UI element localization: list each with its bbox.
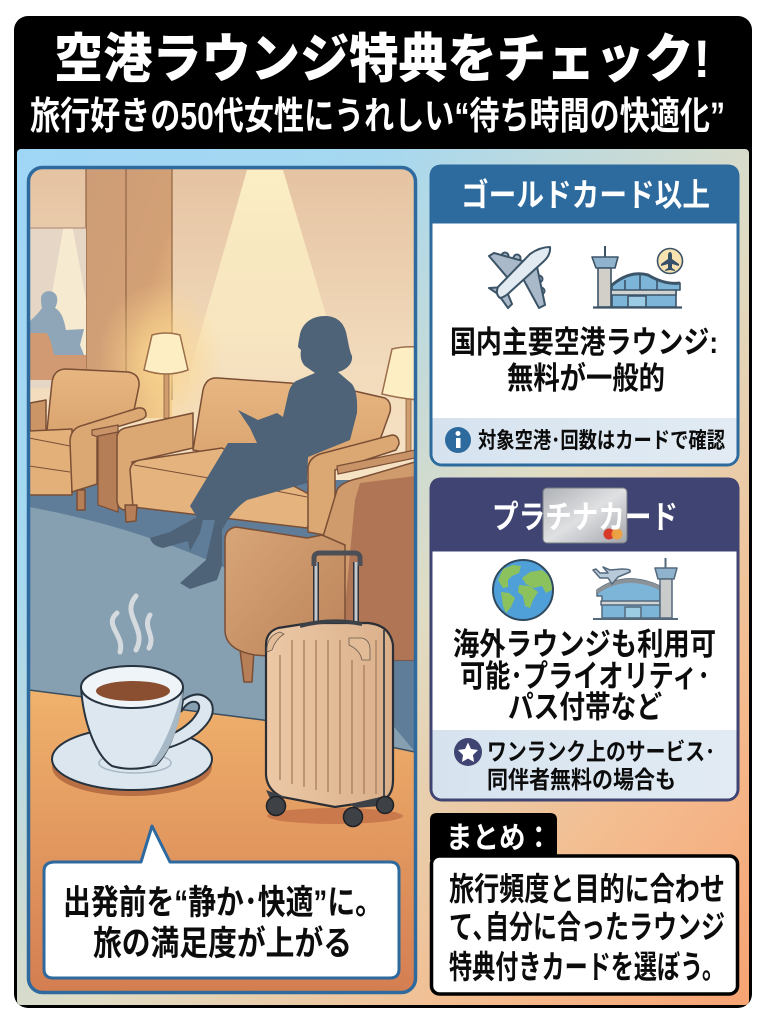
gradient background <box>17 149 749 1005</box>
pillar <box>86 168 172 418</box>
bubble text: 旅の満足度が上がる <box>93 924 352 963</box>
panel: lounge illustration <box>28 168 418 992</box>
platinum main text: パス付帯など <box>508 690 662 725</box>
platinum main text: 可能･プライオリティ･ <box>460 659 710 694</box>
platinum main text: 海外ラウンジも利用可 <box>453 627 716 662</box>
woman silhouette <box>150 316 357 589</box>
platinum footer note: 同伴者無料の場合も <box>487 767 676 794</box>
floor lamp right <box>381 346 414 452</box>
summary text <box>449 871 725 985</box>
armchair centre <box>117 378 390 528</box>
table top <box>29 690 415 992</box>
panel: summary <box>430 813 738 994</box>
platinum footer note: ワンランク上のサービス･ <box>487 739 715 766</box>
summary box <box>432 856 738 994</box>
platinum header: プラチナカード <box>492 499 678 535</box>
right side table <box>337 450 415 474</box>
background window with seated person <box>30 220 86 388</box>
coffee cup and saucer <box>52 666 213 796</box>
armchair left <box>29 369 146 510</box>
summary tab: まとめ： <box>446 822 552 855</box>
bubble text <box>63 884 383 963</box>
lamp glow <box>108 290 212 422</box>
suitcase <box>266 553 403 826</box>
floor lamp left <box>144 333 188 418</box>
panel: platinum card <box>431 479 738 800</box>
gold main text: 国内主要空港ラウンジ: <box>450 325 718 360</box>
gold footer note <box>432 418 736 464</box>
gold main text <box>450 325 718 396</box>
platinum footer note <box>432 730 736 798</box>
icon: airport with plane <box>593 558 678 619</box>
icon: airport terminal <box>592 246 682 308</box>
gold header: ゴールドカード以上 <box>461 177 710 213</box>
steam <box>112 596 151 652</box>
title: 空港ラウンジ特典をチェック! <box>54 30 710 89</box>
icon: globe <box>493 560 553 620</box>
platinum main text <box>453 627 716 725</box>
summary tab <box>430 813 557 860</box>
gold header <box>431 166 738 222</box>
ceiling light cone <box>198 170 326 358</box>
speech bubble <box>44 826 399 978</box>
front armchair <box>225 462 415 682</box>
platinum header <box>431 479 738 550</box>
gold main text: 無料が一般的 <box>507 361 665 396</box>
panel border <box>28 168 416 992</box>
bubble text: 出発前を“静か･快適”に。 <box>63 884 383 922</box>
floor <box>29 480 415 770</box>
side table <box>92 425 118 512</box>
icon: airplane <box>489 247 550 308</box>
silver card graphic <box>543 488 627 543</box>
armchair centre right arm <box>308 435 399 537</box>
panel: gold card <box>431 166 738 465</box>
